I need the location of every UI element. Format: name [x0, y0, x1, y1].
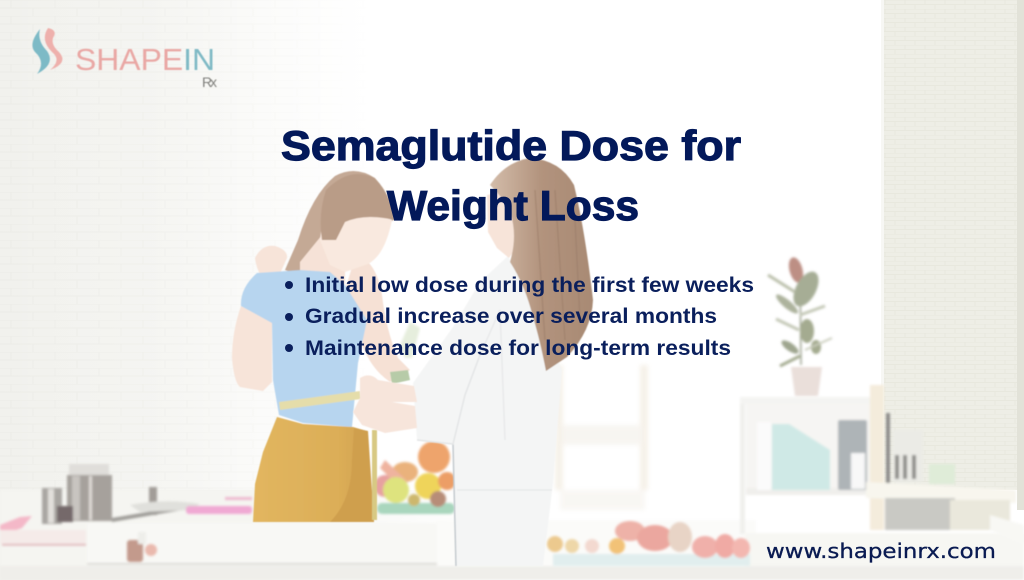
face	[487, 190, 522, 258]
title	[281, 122, 741, 229]
bullet 1: Initial low dose during the first few weeks	[305, 273, 754, 297]
coat	[413, 256, 562, 566]
logo mark	[32, 28, 62, 74]
back counter and front table	[0, 490, 1024, 580]
back hair	[285, 171, 394, 275]
pink items on right table	[547, 521, 750, 566]
pale plant behind women	[400, 322, 420, 358]
hair front	[321, 174, 394, 240]
person: woman being measured	[232, 171, 410, 522]
logo: ShapeIn Rx	[32, 28, 217, 90]
bullet 3: Maintenance dose for long-term results	[305, 336, 731, 360]
raised arm and hand at chin	[345, 262, 410, 382]
face	[320, 210, 392, 272]
potted plant	[768, 256, 832, 396]
long hair	[490, 158, 593, 371]
bracelet	[390, 370, 410, 384]
person: doctor with white coat	[353, 158, 593, 566]
kitchen items on left counter	[0, 464, 252, 562]
raised hand	[255, 246, 287, 278]
measuring tape	[279, 391, 361, 410]
arm left	[232, 306, 272, 391]
neck	[300, 235, 345, 285]
bullet list	[285, 273, 754, 360]
bullet 2: Gradual increase over several months	[305, 304, 717, 328]
logo rx: Rx	[202, 74, 217, 90]
shelf with plant, folder and bottle	[740, 385, 1024, 545]
logo wordmark: SHAPEIN	[75, 42, 215, 77]
hands	[353, 375, 417, 433]
pants	[253, 417, 374, 522]
fruit basket	[374, 441, 456, 514]
wooden shelf behind doctor	[555, 365, 648, 510]
website url: www.shapeinrx.com	[766, 539, 996, 563]
blue shirt	[241, 268, 367, 427]
title: Weight Loss	[387, 182, 639, 229]
title: Semaglutide Dose for	[281, 122, 741, 169]
